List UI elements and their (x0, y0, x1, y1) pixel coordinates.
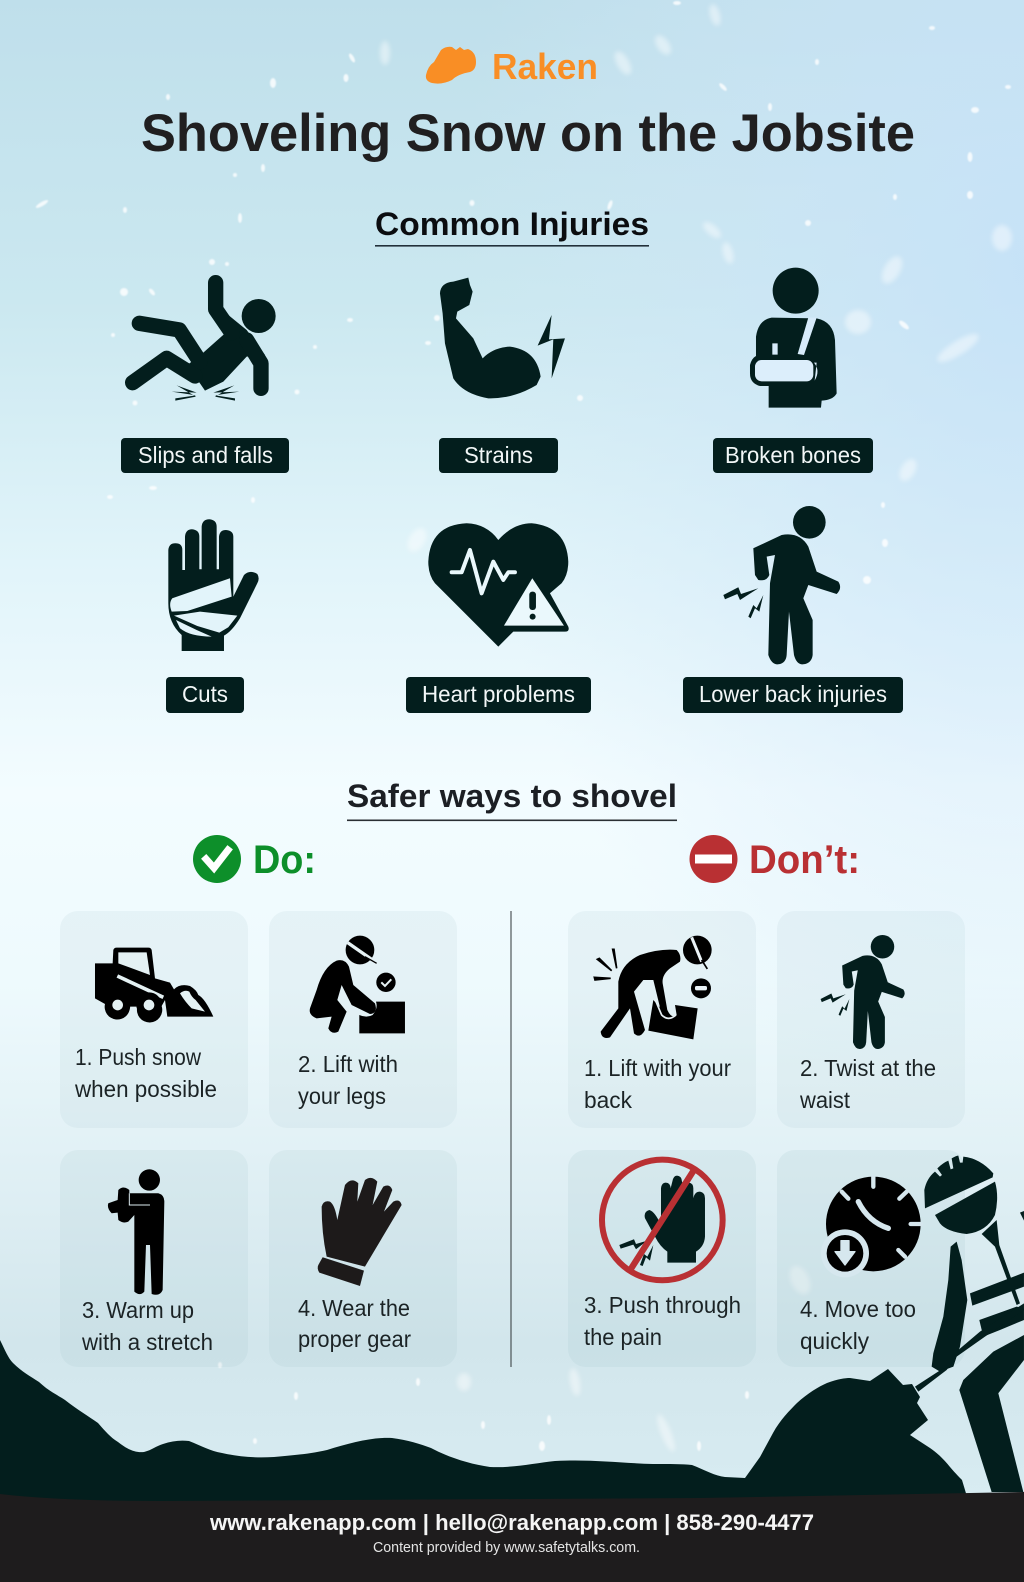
footer: Content provided by www.safetytalks.com. (373, 1540, 640, 1556)
title: Shoveling Snow on the Jobsite (141, 104, 915, 163)
text: 2. Twist at the (800, 1055, 936, 1081)
label: Slips and falls (121, 438, 289, 473)
text (298, 1295, 411, 1352)
text: 4. Wear the (298, 1295, 410, 1321)
label: Strains: Strains (464, 442, 533, 468)
footer: www.rakenapp.com | hello@rakenapp.com | 858-290-4477 (209, 1510, 814, 1535)
card: warm up (60, 1150, 248, 1367)
card: push through pain (568, 1150, 756, 1367)
icon: strains arm (440, 278, 565, 398)
label: Heart problems: Heart problems (422, 681, 575, 707)
text: quickly (800, 1328, 869, 1354)
Do heading with check icon: Do: (253, 838, 316, 882)
text (81, 1297, 213, 1355)
text: your legs (298, 1083, 386, 1109)
card: lift with back (568, 911, 756, 1128)
label: Cuts: Cuts (182, 681, 228, 707)
snowy ground silhouette with pile (0, 1340, 968, 1510)
Don't heading with no-entry icon (690, 835, 860, 883)
text (584, 1292, 741, 1350)
Don't heading with no-entry icon: Don’t: (749, 838, 860, 882)
label: Strains (439, 438, 558, 473)
panel: common injuries icons (121, 268, 903, 713)
icon: gauge with down arrow (821, 1177, 921, 1277)
panel: don't cards (568, 911, 965, 1367)
logo: Raken helmet and wordmark (426, 46, 598, 87)
icon: man with back pain (821, 935, 905, 1049)
text (584, 1055, 731, 1113)
text: waist (799, 1087, 850, 1113)
card: twist at waist (777, 911, 965, 1128)
icon: skid steer (95, 948, 213, 1022)
text: with a stretch (81, 1329, 213, 1355)
Do heading with check icon (193, 835, 316, 883)
label: Cuts (166, 677, 244, 713)
icon: broken bones (750, 268, 837, 408)
icon: cuts bandaged hand (168, 519, 259, 651)
divider (510, 911, 512, 1367)
label: Lower back injuries (683, 677, 903, 713)
label: Heart problems (406, 677, 591, 713)
icon: lower back injuries (723, 506, 840, 664)
text: 1. Lift with your (584, 1055, 731, 1081)
label: Lower back injuries: Lower back injuries (699, 681, 887, 707)
text (74, 1044, 217, 1102)
heading: Common Injuries: Common Injuries (375, 206, 649, 242)
heading: Safer ways to shovel: Safer ways to shovel (347, 778, 677, 814)
label: Broken bones (713, 438, 873, 473)
text: back (584, 1087, 632, 1113)
label: Broken bones: Broken bones (725, 442, 861, 468)
icon: crossed hand in prohibition sign (602, 1160, 723, 1280)
text: the pain (584, 1324, 662, 1350)
icon: heart problems (428, 523, 569, 647)
card: lift with legs (269, 911, 457, 1128)
card: proper gear (269, 1150, 457, 1367)
text (799, 1055, 936, 1113)
logo: Raken helmet and wordmark: Raken (492, 46, 598, 87)
icon: slips and falls (133, 283, 276, 401)
text: 3. Warm up (82, 1297, 194, 1323)
footer (0, 1492, 1024, 1582)
text: 1. Push snow (75, 1044, 202, 1070)
label: Slips and falls: Slips and falls (138, 442, 273, 468)
worker silhouette shoveling (915, 1156, 1024, 1492)
text: 4. Move too (800, 1296, 916, 1322)
text: 3. Push through (584, 1292, 741, 1318)
icon: bent worker with back pain (594, 936, 712, 1039)
text (298, 1051, 398, 1109)
text: when possible (74, 1076, 217, 1102)
icon: stretching man (108, 1169, 164, 1295)
panel: do cards (60, 911, 457, 1367)
text: proper gear (298, 1326, 411, 1352)
card: move too quickly (777, 1150, 965, 1367)
text (800, 1296, 916, 1354)
icon: glove (318, 1178, 402, 1286)
text: 2. Lift with (298, 1051, 398, 1077)
icon: worker lifting with legs (310, 936, 405, 1033)
card: push snow (60, 911, 248, 1128)
